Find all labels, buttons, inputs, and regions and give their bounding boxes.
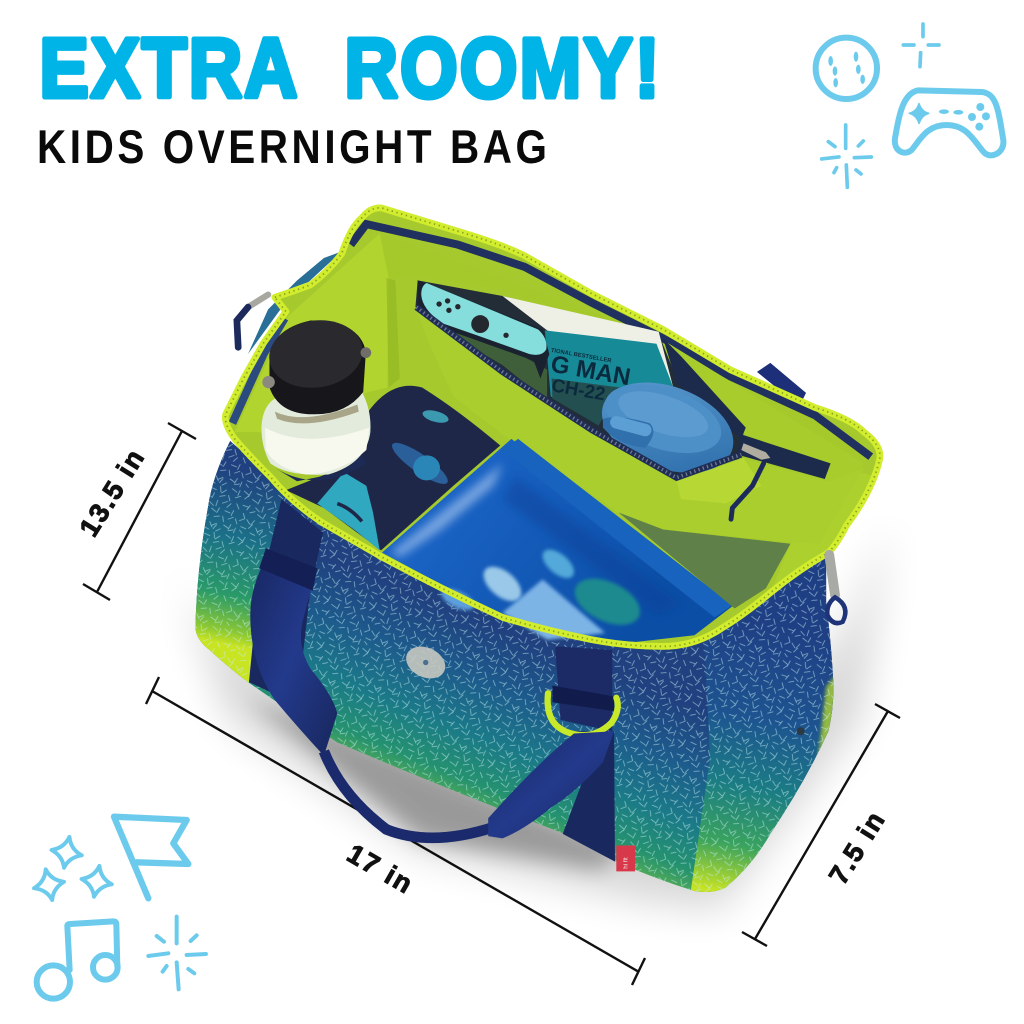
title: EXTRA: [40, 21, 297, 115]
icon: burst sparkle: [822, 125, 871, 187]
dimension: 7.5 in: 7.5 in: [823, 805, 892, 890]
bag body: [195, 441, 834, 892]
pocket zipper pull: [731, 434, 831, 519]
dimension: 17 in: 17 in: [342, 838, 419, 900]
d-ring: [548, 693, 618, 735]
bag interior: [217, 200, 886, 655]
carry handle: [250, 548, 614, 838]
pocket zipper: [416, 307, 741, 478]
bag photo: [190, 200, 886, 905]
water bottle: [261, 314, 371, 481]
pocket front panel: [415, 307, 864, 544]
zipper rim: [225, 208, 880, 646]
icon: music note: [37, 921, 118, 999]
icon: baseball: [816, 38, 877, 99]
game console controller: [418, 280, 549, 379]
icon: stars: [31, 834, 115, 903]
bag shadow: [160, 520, 890, 910]
title: [40, 21, 660, 115]
dark pocket opening: [415, 280, 744, 477]
dimension: 13.5 in: 13.5 in: [74, 443, 151, 542]
left zipper pull: [237, 295, 268, 347]
icon: game controller: [895, 90, 1003, 155]
book: TIONAL BESTSELLER: [550, 348, 613, 365]
back panel exterior: [248, 251, 342, 354]
dimension: 7.5 in: [742, 704, 900, 946]
back strap: [757, 363, 806, 406]
bottle lid container: [589, 366, 746, 490]
icons: stars, flag, music note, sparkle: [31, 817, 206, 999]
icon: burst sparkle: [148, 917, 206, 989]
lower right wall: [770, 472, 877, 593]
brand tag: hi fit: [622, 857, 629, 869]
subtitle: KIDS OVERNIGHT BAG: [37, 121, 547, 174]
icon: sparkle: [903, 24, 939, 67]
title: ROOMY!: [344, 21, 660, 115]
icons: baseball, controller, sparkles: [816, 24, 1003, 187]
toiletry pouch: [382, 439, 732, 642]
navy shirt with planets: [286, 386, 500, 550]
right upper strap: [555, 646, 612, 731]
strap loop: [552, 686, 614, 711]
book: CH-22: [550, 374, 607, 404]
logo: [401, 640, 451, 684]
brand tag: [616, 845, 635, 871]
dimension: 13.5 in: [74, 423, 196, 600]
interior left wall: [235, 233, 389, 432]
right lower strap: [563, 731, 615, 862]
book: G MAN: [549, 351, 633, 391]
book: [502, 296, 673, 425]
left fold shade: [386, 278, 400, 387]
dimension: 17 in: [146, 677, 645, 985]
right zipper pull: [827, 555, 845, 623]
olive clothes: [619, 512, 790, 608]
snap: [797, 727, 805, 735]
interior navy trim: [351, 224, 871, 457]
right interior wall: [668, 343, 728, 380]
icon: flag: [114, 817, 188, 898]
left anchor strap: [249, 499, 323, 704]
